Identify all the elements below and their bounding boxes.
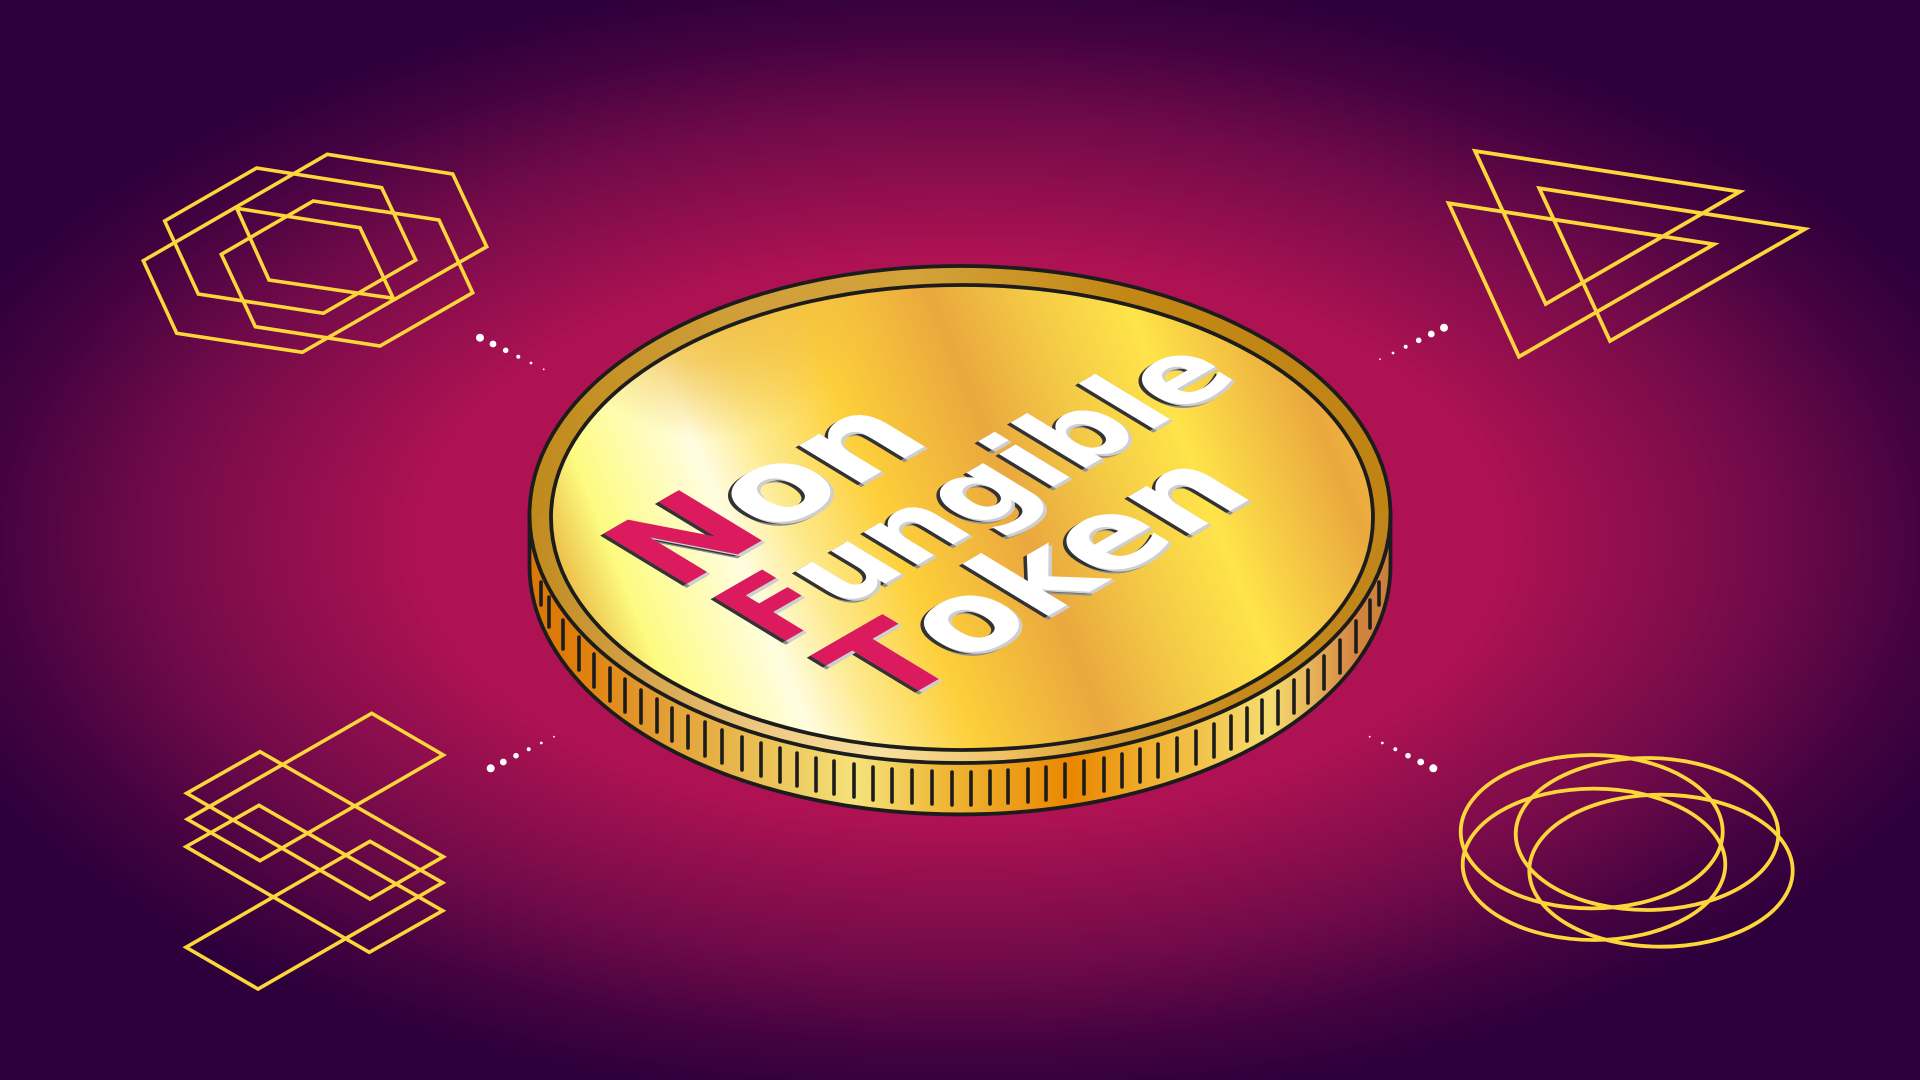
isometric title: Non Fungible Token: Token bbox=[788, 432, 1284, 723]
coin face bbox=[549, 283, 1375, 752]
connector dots: bottom right bbox=[1369, 736, 1437, 772]
connector dots: bottom left bbox=[487, 736, 555, 772]
isometric title: Non Fungible Token bbox=[572, 323, 1284, 723]
icon: overlapping isometric rhombi bbox=[186, 713, 443, 989]
icon: overlapping ellipses bbox=[1461, 755, 1793, 947]
isometric title: Non Fungible Token: Fungible bbox=[687, 323, 1266, 660]
coin side edge bbox=[530, 514, 1390, 814]
connector dots: top left bbox=[476, 334, 545, 370]
isometric title: Non Fungible Token: Non bbox=[572, 378, 961, 607]
coin rim bbox=[530, 266, 1390, 763]
connector dots: top right bbox=[1379, 324, 1448, 360]
coin edge ticks bbox=[541, 582, 1379, 805]
icon: overlapping isometric triangles bbox=[1449, 151, 1805, 357]
icon: overlapping isometric hexagons bbox=[143, 154, 487, 352]
gold coin bbox=[528, 264, 1392, 816]
